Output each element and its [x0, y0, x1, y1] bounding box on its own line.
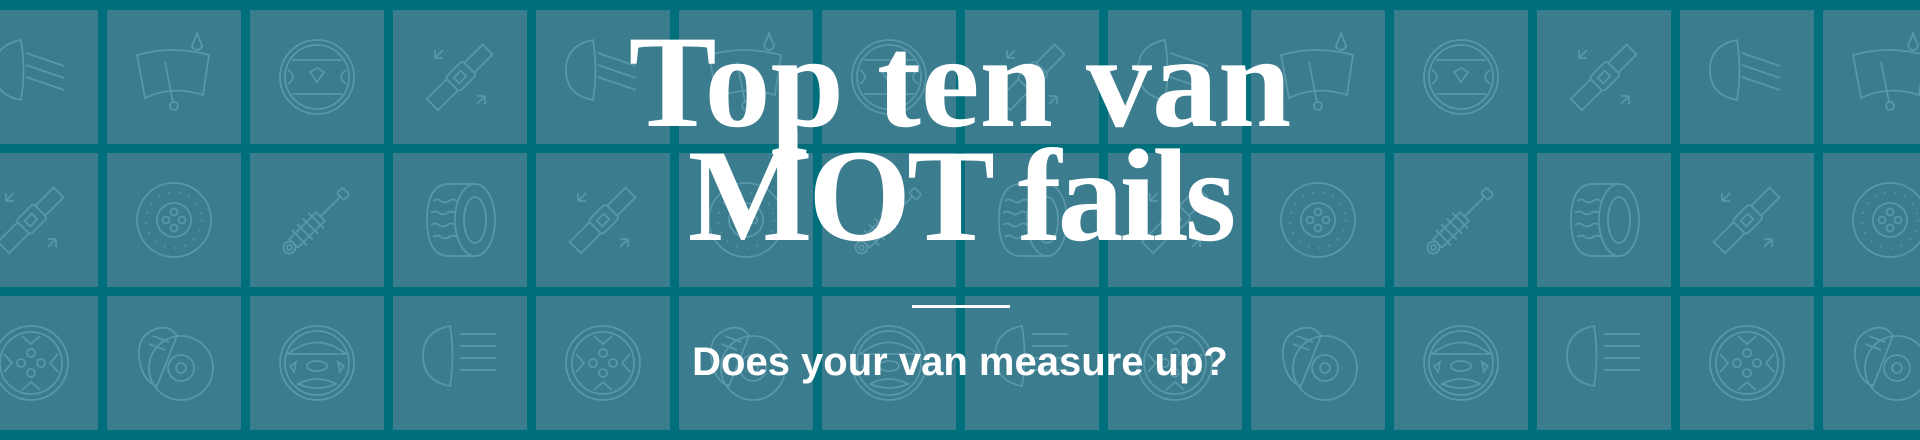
row 2 tiles: [0, 153, 1920, 287]
row 3 tiles: [0, 296, 1920, 430]
subtitle: Does your van measure up?: [692, 340, 1228, 384]
divider rule: [912, 305, 1010, 308]
title line 2: MOT fails: [688, 122, 1232, 269]
row 1 tiles: [0, 10, 1920, 144]
title line 1: Top ten van: [629, 8, 1291, 155]
